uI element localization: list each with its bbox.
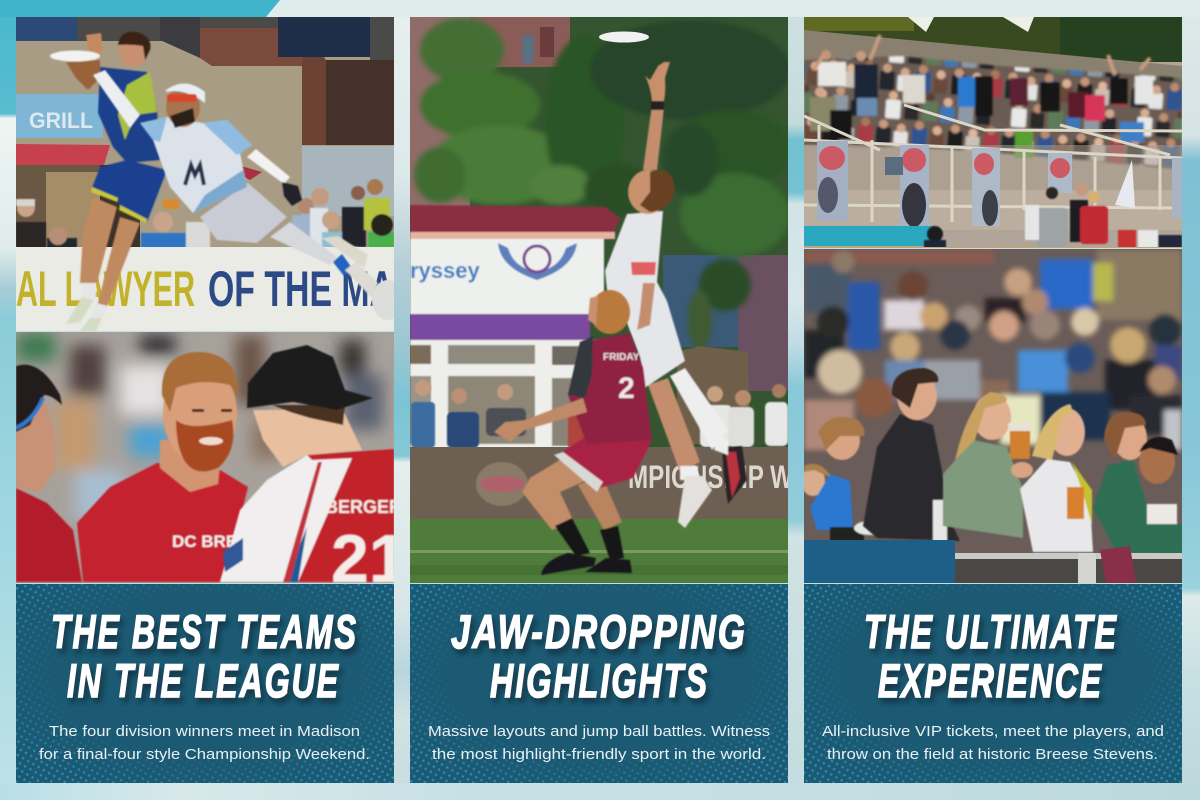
- description: The four division winners meet in Madison: [49, 723, 360, 740]
- person: player with black cap: BERGERON: [325, 497, 429, 517]
- text card: experience: [804, 584, 1182, 783]
- fan: man in black jacket: [862, 367, 960, 542]
- heading: JAW-DROPPING: [451, 605, 747, 658]
- player: blue and yellow jersey: [50, 32, 167, 331]
- description: [822, 723, 1164, 763]
- person: left teammate: [16, 365, 82, 582]
- fan: woman in green jacket: [1093, 412, 1182, 554]
- blurred crowd backdrop: [16, 332, 383, 520]
- person: bearded player in red: [77, 352, 249, 582]
- railings: [804, 105, 1182, 222]
- heading: THE BEST TEAMS: [51, 605, 358, 658]
- player: crouching in maroon: [494, 290, 652, 575]
- banners with player portraits: [817, 141, 1182, 231]
- fan: woman in sage jacket: [943, 392, 1033, 538]
- advertising board: MPIONSHIP W: [628, 459, 794, 495]
- heading: [51, 605, 358, 707]
- text card: best teams: [16, 584, 394, 783]
- text card: highlights: [410, 584, 788, 783]
- photo: teammates talking: [16, 332, 394, 583]
- frisbee: [599, 32, 649, 42]
- description: All-inclusive VIP tickets, meet the players, and: [822, 723, 1164, 740]
- description: for a final-four style Championship Weekend.: [39, 746, 370, 763]
- panel: best teams: [16, 17, 429, 783]
- photo: jump ball: [410, 17, 794, 583]
- crowd: [804, 35, 1182, 170]
- photo: diving catch: [16, 17, 404, 331]
- fan: blonde woman in white: [1020, 404, 1093, 552]
- heading: IN THE LEAGUE: [67, 654, 340, 707]
- description: [39, 723, 370, 763]
- heading: HIGHLIGHTS: [490, 654, 709, 707]
- player: crouching in maroon: 2: [618, 372, 635, 405]
- grass field: [410, 519, 788, 583]
- description: Massive layouts and jump ball battles. Witness: [428, 723, 770, 740]
- fan: boy in blue: [804, 416, 874, 540]
- description: the most highlight-friendly sport in the world.: [432, 746, 766, 763]
- heading: [864, 605, 1118, 707]
- panel: highlights: [410, 17, 794, 783]
- description: throw on the field at historic Breese Stevens.: [827, 746, 1158, 763]
- heading: [451, 605, 747, 707]
- photo: fans with beer: [801, 249, 1182, 583]
- building with sign: ryssey: [410, 258, 481, 283]
- advertising board: [410, 447, 794, 519]
- person: player with black cap: [219, 344, 394, 583]
- description: [428, 723, 770, 763]
- panel: experience: [801, 17, 1182, 783]
- banner: sponsor board: [16, 247, 404, 331]
- player: leaping in white: [605, 62, 747, 528]
- banner: sponsor board: AL LAWYER: [16, 261, 195, 317]
- blue tarp: [804, 540, 955, 583]
- banner: sponsor board: OF THE MA: [208, 261, 394, 317]
- photo: stadium stands: [804, 17, 1182, 248]
- person: bearded player in red: DC BREE: [172, 532, 249, 551]
- photo: diving catch: GRILL: [29, 108, 93, 133]
- player: diving in white and light blue: [93, 70, 378, 298]
- blurred crowd backdrop: [804, 250, 1182, 450]
- player: crouching in maroon: FRIDAY: [603, 352, 640, 363]
- teal barrier: [804, 226, 934, 246]
- spectators behind board: [411, 380, 788, 448]
- backdrop: buildings and trees: [410, 17, 790, 391]
- background spectators: [16, 179, 394, 250]
- building with sign: [410, 205, 620, 452]
- chain-link fence: [955, 546, 1182, 583]
- person: player with black cap: 21: [331, 521, 407, 597]
- stone pillar: [677, 346, 750, 444]
- foreground spectators: [924, 184, 1182, 248]
